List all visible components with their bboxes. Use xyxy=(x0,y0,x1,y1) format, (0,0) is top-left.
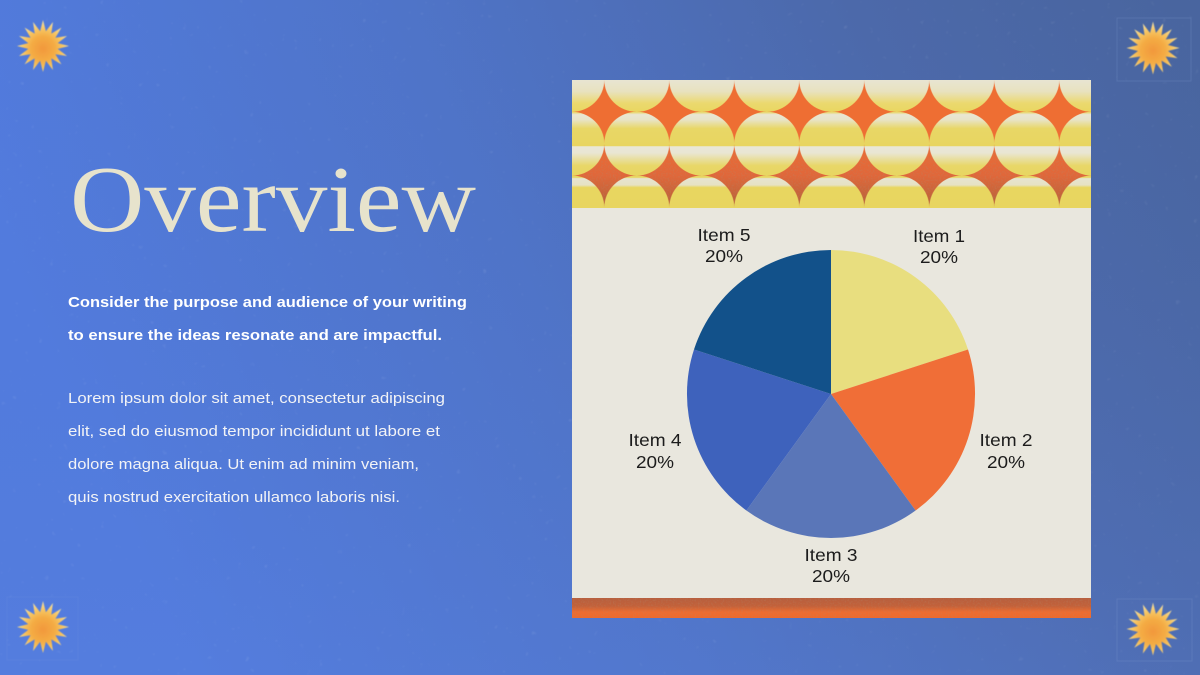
label: Item 5: 20% xyxy=(705,246,743,266)
body text: dolore magna aliqua. Ut enim ad minim veniam, xyxy=(68,456,419,473)
icon: sun top left xyxy=(17,20,69,72)
icon: sun top right xyxy=(1117,18,1191,81)
panel: chart card xyxy=(572,80,1091,618)
label: Item 4: 20% xyxy=(636,452,674,472)
body text: Lorem ipsum dolor sit amet, consectetur adipiscing xyxy=(68,390,445,407)
label: Item 5 xyxy=(698,225,750,266)
label: Item 2: 20% xyxy=(987,452,1025,472)
label: Item 5: Item 5 xyxy=(698,225,750,245)
body text: quis nostrud exercitation ullamco laboris nisi. xyxy=(68,489,400,506)
label: Item 4 xyxy=(628,430,682,472)
title: Overview xyxy=(70,148,476,252)
label: Item 3: 20% xyxy=(812,566,850,586)
icon: sun bottom right xyxy=(1117,599,1192,661)
subheading text xyxy=(68,294,467,344)
label: Item 2 xyxy=(980,430,1032,472)
body text: elit, sed do eiusmod tempor incididunt ut labore et xyxy=(68,423,441,440)
label: Item 3: Item 3 xyxy=(804,545,858,565)
label: Item 2: Item 2 xyxy=(980,430,1032,450)
label: Item 3 xyxy=(804,545,858,586)
label: Item 4: Item 4 xyxy=(628,430,682,450)
subheading text: Consider the purpose and audience of your writing xyxy=(68,294,467,311)
label: Item 1 xyxy=(913,226,965,267)
label: Item 1: Item 1 xyxy=(913,226,965,246)
pie chart xyxy=(687,250,975,538)
bottom orange strip xyxy=(572,598,1091,618)
icon: sun bottom left xyxy=(7,597,78,660)
label: Item 1: 20% xyxy=(920,247,958,267)
subheading text: to ensure the ideas resonate and are impactful. xyxy=(68,327,442,344)
body text xyxy=(68,390,445,506)
decorative star pattern band xyxy=(572,80,1091,208)
